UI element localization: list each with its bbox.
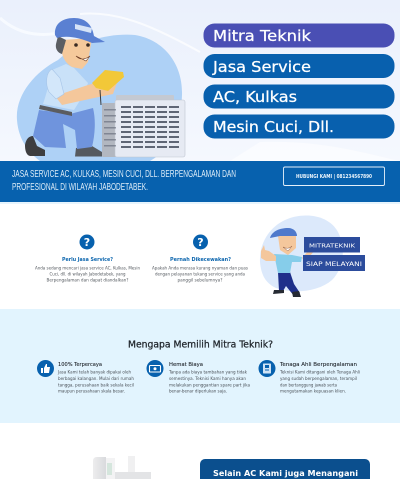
block: Perlu Jasa Service: Berpengalaman dan dapat diandalkan? bbox=[46, 278, 128, 282]
icon: question mark: ? bbox=[84, 236, 90, 249]
feature: 100% Terpercaya bbox=[37, 360, 134, 394]
block: Pernah Dikecewakan: Apakah Anda merasa kurang nyaman dan puas bbox=[152, 266, 248, 270]
feature: 100% Terpercaya: 100% Terpercaya bbox=[58, 362, 102, 368]
block: Perlu Jasa Service bbox=[35, 234, 140, 282]
band text bbox=[12, 169, 236, 193]
block: Pernah Dikecewakan bbox=[152, 234, 248, 282]
feature: Tenaga Ahli Berpengalaman: yang sudah berpengalaman, terampil bbox=[280, 376, 357, 381]
band text: JASA SERVICE AC, KULKAS, MESIN CUCI, DLL. BERPENGALAMAN DAN bbox=[12, 169, 236, 180]
feature: Tenaga Ahli Berpengalaman: mengutamakan kepuasan klien. bbox=[280, 388, 346, 394]
pill: Mitra Teknik bbox=[204, 24, 394, 48]
AC unit bbox=[102, 95, 185, 157]
icon: question mark: ? bbox=[197, 236, 204, 249]
panel: blue call-to-action band bbox=[0, 161, 400, 204]
feature: Hemat Biaya: melakukan penggantian spare part jika bbox=[169, 382, 250, 388]
feature: Tenaga Ahli Berpengalaman bbox=[258, 360, 360, 394]
icon: thumbs up bbox=[37, 360, 54, 377]
block: Perlu Jasa Service: Cuci, dll. di wilayah Jabodetabek, yang bbox=[50, 272, 126, 276]
feature: Hemat Biaya: semestinya. Teknisi Kami hanya akan bbox=[169, 376, 246, 381]
pill: Jasa Service bbox=[204, 54, 394, 78]
feature: Hemat Biaya: Tanpa ada biaya tambahan yang tidak bbox=[168, 370, 248, 374]
button: contact: HUBUNGI KAMI | 081234567890 bbox=[296, 174, 372, 180]
block: Pernah Dikecewakan: panggil sebelumnya? bbox=[178, 278, 222, 282]
panel: other services heading: Selain AC Kami juga Menangani bbox=[213, 469, 358, 478]
pill: Jasa Service: Jasa Service bbox=[212, 58, 311, 76]
block: Perlu Jasa Service: Perlu Jasa Service? bbox=[62, 257, 113, 263]
block: Pernah Dikecewakan: dengan pelayanan tukang service yang anda bbox=[155, 272, 245, 276]
button: contact bbox=[284, 167, 384, 186]
feature: Tenaga Ahli Berpengalaman: dan bertanggung jawab serta bbox=[280, 382, 337, 388]
pill: Mitra Teknik: Mitra Teknik bbox=[213, 27, 311, 45]
panel: other services heading bbox=[200, 459, 370, 479]
feature: Hemat Biaya: Hemat Biaya bbox=[169, 362, 203, 368]
illustration: mascot with signs bbox=[260, 216, 365, 297]
feature: 100% Terpercaya: Jasa Kami telah banyak dipakai oleh bbox=[57, 370, 131, 374]
feature: 100% Terpercaya: maupun perusahaan skala besar. bbox=[58, 388, 125, 394]
illustration: technician with AC unit bbox=[17, 18, 185, 161]
panel: hero bbox=[0, 0, 400, 161]
feature: Tenaga Ahli Berpengalaman: Tenaga Ahli Berpengalaman bbox=[279, 362, 357, 368]
pill: AC, Kulkas: AC, Kulkas bbox=[213, 88, 297, 106]
icon: badge bbox=[258, 360, 276, 377]
feature: 100% Terpercaya: tangga, perusahaan baik sekala kecil bbox=[58, 382, 134, 388]
feature: Tenaga Ahli Berpengalaman: Teknisi Kami ditangani oleh Tenaga Ahli bbox=[279, 370, 360, 374]
mascot bbox=[261, 228, 315, 297]
technician bbox=[25, 18, 124, 156]
icon: banknote bbox=[146, 360, 164, 377]
sign: MITRATEKNIK: MITRATEKNIK bbox=[309, 244, 355, 250]
pill: AC, Kulkas bbox=[204, 84, 394, 108]
heading: Mengapa Memilih Mitra Teknik? bbox=[128, 340, 273, 350]
block: Pernah Dikecewakan: Pernah Dikecewakan? bbox=[170, 257, 231, 263]
block: Perlu Jasa Service: Anda sedang mencari jasa service AC, Kulkas, Mesin bbox=[35, 266, 140, 270]
band text: PROFESIONAL DI WILAYAH JABODETABEK. bbox=[12, 182, 148, 193]
pill: Mesin Cuci, Dll. bbox=[204, 114, 394, 138]
pill: Mesin Cuci, Dll.: Mesin Cuci, Dll. bbox=[213, 118, 334, 136]
illustration: home appliances bbox=[93, 456, 151, 479]
feature: 100% Terpercaya: berbagai kalangan. Mulai dari rumah bbox=[58, 376, 134, 381]
panel: why choose us bbox=[0, 309, 400, 423]
feature: Hemat Biaya: benar-benar diperlukan saja. bbox=[169, 388, 227, 394]
feature: Hemat Biaya bbox=[146, 360, 250, 394]
sign: SIAP MELAYANI: SIAP MELAYANI bbox=[306, 261, 362, 268]
